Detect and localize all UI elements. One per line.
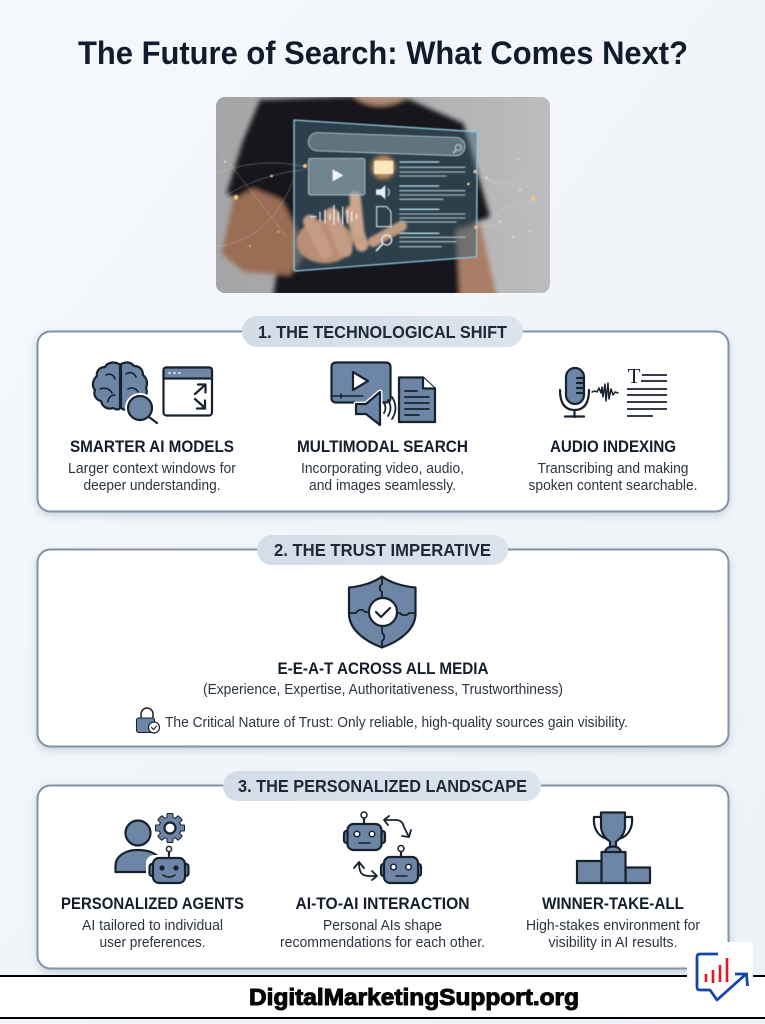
text: multimodal search: MULTIMODAL SEARCH	[297, 438, 468, 456]
text: audio indexing: spoken content searchable.	[528, 477, 698, 494]
panel: 1. the technological shift	[38, 316, 728, 512]
icon: two robots exchanging arrows	[344, 812, 421, 883]
text: audio indexing: Transcribing and making	[538, 460, 688, 477]
text: personalized agents: user preferences.	[100, 934, 206, 951]
text: multimodal search: Incorporating video, audio,	[301, 460, 464, 477]
text: ai-to-ai interaction: recommendations for each other.	[280, 934, 485, 951]
hero photo: hand touching a holographic search interface	[216, 97, 550, 297]
panel: 3. the personalized landscape	[38, 771, 728, 968]
icon: brain with magnifier and expanding window	[93, 363, 212, 423]
text: personalized agents: AI tailored to individual	[82, 917, 223, 934]
footer site name: DigitalMarketingSupport.org	[249, 984, 579, 1010]
icon: puzzle shield with checkmark	[349, 576, 416, 648]
text: ai-to-ai interaction: Personal AIs shape	[323, 917, 442, 934]
icon: microphone, waveform and transcript: T	[628, 364, 641, 388]
text: winner-take-all	[526, 895, 700, 951]
section heading pill 3: 3. THE PERSONALIZED LANDSCAPE	[238, 776, 527, 796]
text: e-e-a-t across all media: (Experience, Expertise, Authoritativeness, Trustworthiness)	[203, 681, 563, 698]
panel: 2. the trust imperative	[38, 535, 728, 746]
logo: chart in speech bubble	[687, 942, 753, 1002]
section heading pill 2	[257, 535, 508, 565]
icon: person, gear and robot agent	[116, 814, 188, 885]
callout: critical nature of trust	[136, 708, 628, 733]
text: winner-take-all: WINNER-TAKE-ALL	[542, 895, 684, 913]
callout: critical nature of trust: The Critical Nature of Trust: Only reliable, high-quality sources gain visibility.	[165, 714, 628, 731]
text: personalized agents	[61, 895, 244, 951]
footer band	[0, 975, 765, 1019]
section heading pill 3	[223, 771, 541, 801]
text: audio indexing: AUDIO INDEXING	[550, 438, 676, 456]
text: smarter ai models: Larger context windows for	[68, 460, 236, 477]
text: ai-to-ai interaction	[280, 895, 485, 951]
section heading pill 2: 2. THE TRUST IMPERATIVE	[274, 540, 491, 560]
text: ai-to-ai interaction: AI-TO-AI INTERACTION	[296, 895, 470, 913]
text: personalized agents: PERSONALIZED AGENTS	[61, 895, 244, 913]
text: multimodal search	[297, 438, 468, 494]
text: smarter ai models	[68, 438, 236, 494]
icon: trophy on podium	[577, 812, 650, 883]
text: winner-take-all: High-stakes environment for	[526, 917, 700, 934]
text: audio indexing	[528, 438, 698, 494]
text: e-e-a-t across all media: E-E-A-T ACROSS ALL MEDIA	[278, 660, 489, 678]
text: smarter ai models: SMARTER AI MODELS	[70, 438, 234, 456]
section heading pill 1: 1. THE TECHNOLOGICAL SHIFT	[258, 322, 507, 342]
icon: microphone, waveform and transcript	[560, 364, 667, 417]
section heading pill 1	[242, 316, 523, 347]
text: e-e-a-t across all media	[203, 660, 563, 698]
text: winner-take-all: visibility in AI results.	[548, 934, 678, 951]
title: The Future of Search: What Comes Next?	[78, 35, 688, 71]
text: smarter ai models: deeper understanding.	[84, 477, 220, 494]
text: multimodal search: and images seamlessly.	[309, 477, 456, 494]
icon: padlock with check	[136, 708, 160, 733]
icon: video, speaker and document	[332, 362, 435, 425]
